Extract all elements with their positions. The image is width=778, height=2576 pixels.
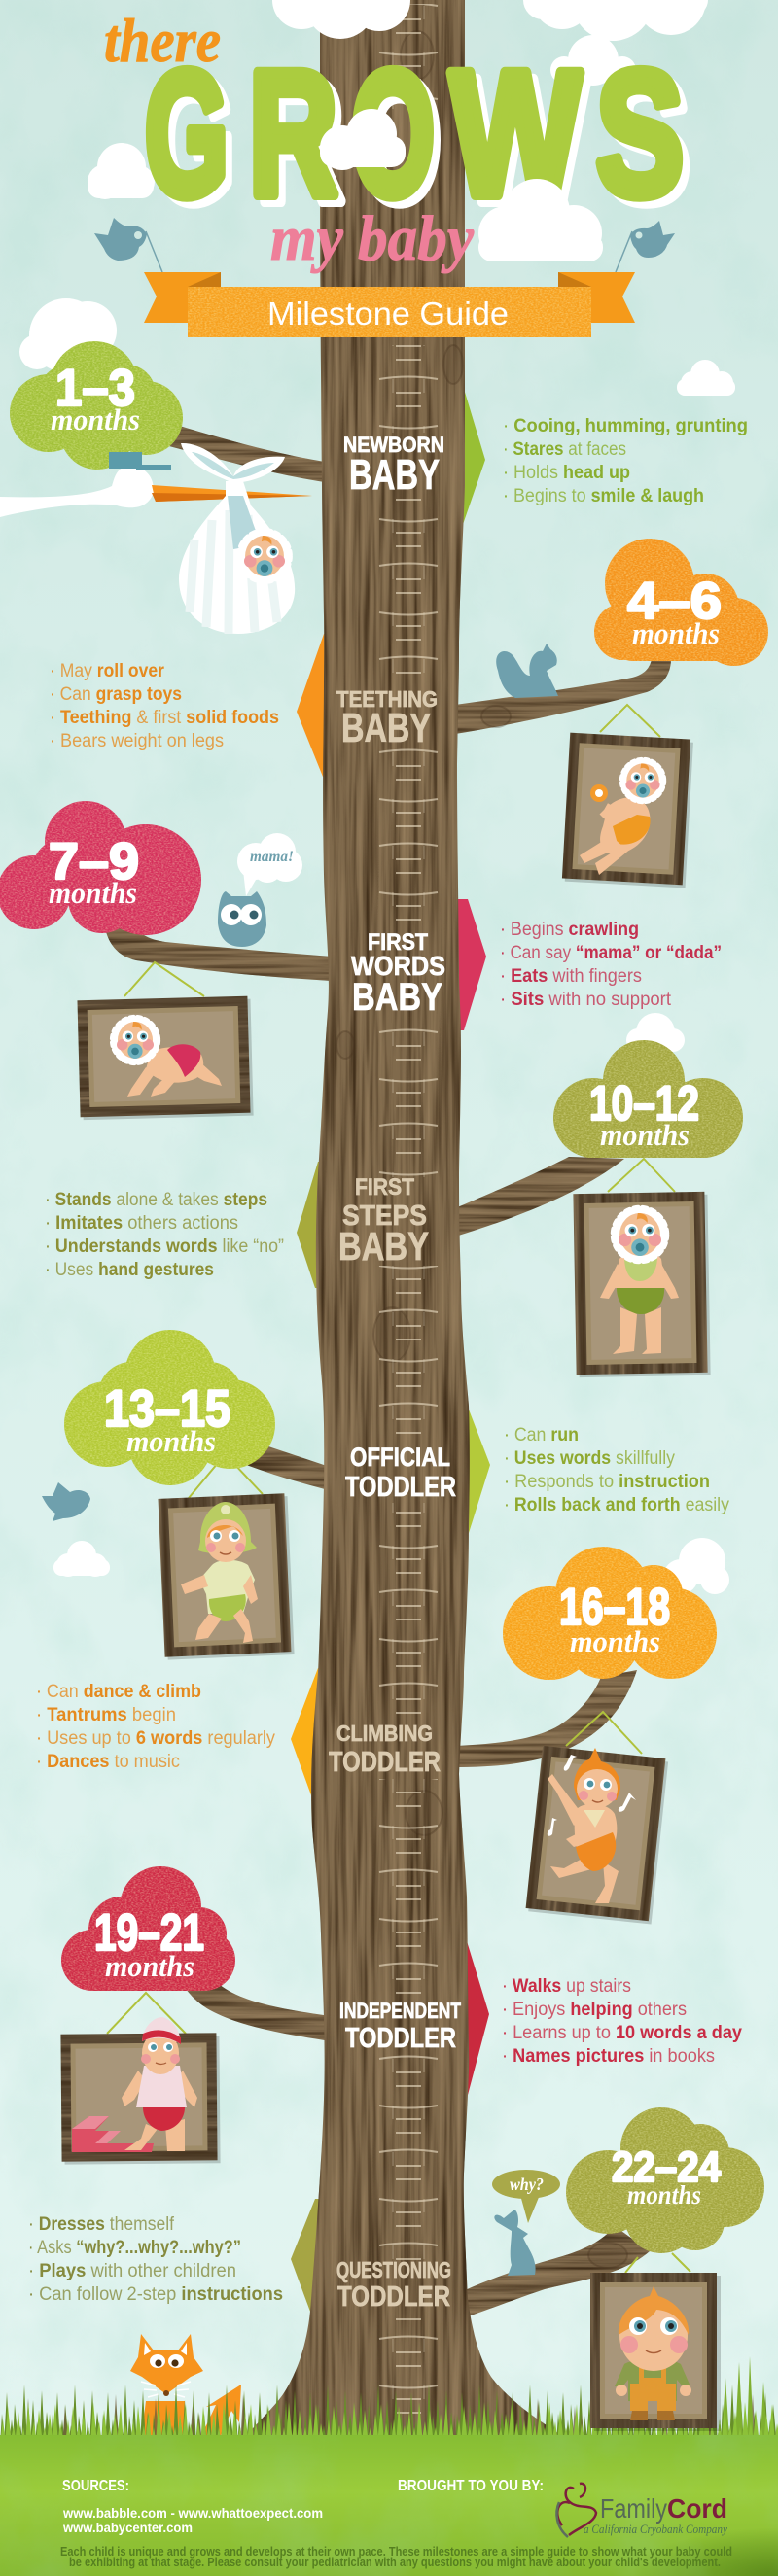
arrow: independent toddler (457, 1941, 489, 2095)
speech bubble: mama: mama! (250, 849, 294, 865)
panel: first words baby label: BABY (352, 976, 442, 1019)
panel: first steps baby label: FIRST (355, 1174, 414, 1201)
age unit: months (105, 1949, 194, 1983)
footer: sources (62, 2478, 323, 2535)
text block: first words milestones: · Can say “mama” or “dada” (500, 943, 722, 963)
age unit: months (600, 1118, 690, 1152)
age unit: months (627, 2180, 701, 2210)
footer: sources: www.babble.com - www.whattoexpect.com (62, 2505, 323, 2521)
panel: first steps baby label: STEPS (342, 1201, 427, 1232)
wood knots (336, 31, 627, 2268)
title: my baby: my baby (270, 203, 475, 274)
logo: FamilyCord (556, 2484, 727, 2537)
text block: questioning toddler milestones (28, 2214, 283, 2305)
text block: first words milestones: · Sits with no support (500, 990, 672, 1010)
panel: 4-6 months (496, 539, 768, 888)
icon: left bird with ribbon string (94, 218, 162, 272)
picture frame with baby holding rattle (562, 733, 693, 888)
text block: official toddler milestones: · Responds to instruction (504, 1472, 710, 1492)
text block: teething milestones: · May roll over (50, 661, 165, 681)
text block: teething milestones: · Teething & first solid foods (50, 708, 279, 728)
panel: teething baby label (336, 686, 438, 750)
age unit: months (632, 616, 720, 650)
picture frame with crawling baby (77, 996, 254, 1120)
age number: 19–21 (94, 1904, 204, 1962)
text block: questioning toddler milestones: · Plays with other children (28, 2261, 236, 2281)
text block: newborn milestones: · Begins to smile & laugh (503, 486, 704, 506)
hanger (124, 962, 204, 996)
cloud under the W of the title (478, 179, 603, 261)
text block: climbing toddler milestones: · Tantrums begin (36, 1705, 176, 1725)
title: GROWS: G (145, 34, 229, 232)
text block: independent toddler milestones: · Enjoys helping others (502, 2000, 687, 2020)
hanger (625, 2253, 690, 2273)
cloud: 1-3 months (10, 341, 183, 470)
cloud: 4-6 months (594, 539, 768, 666)
speech bubble: why: why? (510, 2175, 544, 2194)
cloud: 22-24 months (566, 2107, 764, 2253)
text block: first steps milestones: · Stands alone & takes steps (45, 1190, 267, 1210)
footer: sources: SOURCES: (62, 2478, 129, 2494)
text block: questioning toddler milestones: · Asks “why?...why?...why?” (28, 2238, 241, 2258)
age unit: months (126, 1424, 216, 1458)
text block: independent toddler milestones (502, 1976, 742, 2067)
title: GROWS: W (457, 41, 587, 239)
text block: newborn milestones: · Holds head up (503, 463, 630, 483)
icon: squirrel (496, 644, 558, 698)
panel: teething baby label: BABY (341, 705, 431, 750)
banner text: Milestone Guide (267, 296, 509, 331)
text block: first steps milestones: · Understands words like “no” (45, 1236, 284, 1257)
panel: 1-3 months (0, 341, 312, 634)
panel: 10-12 months (553, 1040, 743, 1377)
text block: independent toddler milestones: · Names pictures in books (502, 2046, 715, 2067)
panel: questioning toddler label: QUESTIONING (336, 2257, 451, 2282)
icon: stork carrying baby bundle (0, 443, 312, 634)
text block: independent toddler milestones: · Walks up stairs (502, 1976, 631, 1997)
tree trunk with wood grain (243, 0, 569, 2440)
text block: questioning toddler milestones: · Dresses themself (28, 2214, 175, 2235)
picture frame with toddler in overalls (590, 2273, 721, 2431)
panel: 19-21 months (60, 1866, 235, 2165)
cloud: 19-21 months (61, 1866, 235, 1991)
panel: independent toddler label: INDEPENDENT (339, 1999, 461, 2023)
age number: 1–3 (55, 360, 135, 417)
banner ribbon (144, 272, 635, 337)
text block: first steps milestones: · Uses hand gestures (45, 1260, 214, 1280)
panel: 16-18 months (503, 1547, 717, 1925)
text block: first steps milestones: · Imitates others actions (45, 1213, 238, 1234)
icon: bird (42, 1482, 90, 1521)
age number: 4–6 (627, 573, 722, 630)
panel: first words baby label (351, 929, 445, 1019)
icon: owl (218, 891, 266, 947)
panel: 13-15 months (42, 1330, 295, 1660)
arrow: climbing toddler (291, 1668, 331, 1828)
text block: independent toddler milestones: · Learns up to 10 words a day (502, 2023, 742, 2043)
text block: climbing toddler milestones: · Dances to music (36, 1752, 180, 1772)
arrow: teething (297, 634, 331, 777)
age number: 10–12 (589, 1076, 699, 1131)
panel: climbing toddler label: CLIMBING (336, 1721, 433, 1746)
text block: questioning toddler milestones: · Can follow 2-step instructions (28, 2284, 283, 2305)
text block: official toddler milestones: · Can run (504, 1425, 579, 1445)
panel: teething baby label: TEETHING (336, 686, 438, 712)
text block: first words milestones: · Begins crawling (500, 920, 639, 940)
text block: newborn milestones: · Stares at faces (503, 439, 626, 460)
text block: first words milestones: · Eats with fingers (500, 966, 642, 987)
arrow: questioning toddler (291, 2199, 331, 2319)
cloud over the O of the title (320, 109, 406, 170)
panel: first steps baby label: BABY (338, 1224, 429, 1269)
title: GROWS: S (596, 34, 684, 232)
text block: first words milestones (500, 920, 722, 1010)
arrow: official toddler (457, 1410, 490, 1533)
grass lawn with blades (0, 2356, 778, 2576)
logo: FamilyCord: Cord (667, 2493, 727, 2524)
text block: teething milestones: · Can grasp toys (50, 684, 182, 705)
title: GROWS: O (358, 41, 442, 239)
age unit: months (51, 402, 140, 436)
age number: 13–15 (104, 1380, 230, 1438)
picture frame with standing baby (573, 1192, 711, 1377)
title: GROWS: O (351, 34, 435, 232)
footer: brought to you by: BROUGHT TO YOU BY: (398, 2478, 544, 2494)
panel: newborn baby label: BABY (349, 451, 440, 499)
title: GROWS: W (450, 34, 581, 232)
title: GROWS: R (256, 41, 344, 239)
panel: 7-9 months (0, 801, 302, 1120)
cloud: 10-12 months (553, 1040, 743, 1158)
age number: 16–18 (559, 1579, 670, 1636)
panel: official toddler label (345, 1443, 456, 1503)
cloud: 7-9 months (0, 801, 201, 935)
footer: disclaimer (60, 2545, 732, 2569)
picture frame with baby in green hat (158, 1493, 295, 1660)
logo: FamilyCord: a California Cryobank Company (584, 2522, 727, 2536)
title: GROWS: S (603, 41, 690, 239)
logo: FamilyCord: Family (600, 2493, 667, 2524)
panel: official toddler label: TODDLER (345, 1472, 456, 1503)
text block: official toddler milestones: · Uses words skillfully (504, 1448, 675, 1469)
title: GROWS: R (249, 34, 337, 232)
cloud: 16-18 months (503, 1547, 717, 1680)
text block: teething milestones (50, 661, 279, 751)
tree branches (105, 424, 671, 2317)
panel: climbing toddler label (329, 1721, 441, 1778)
text block: newborn milestones (503, 416, 748, 506)
text block: climbing toddler milestones (36, 1682, 275, 1772)
white clouds in the background (19, 35, 735, 1594)
panel: first words baby label: FIRST (368, 929, 428, 956)
age unit: months (570, 1624, 660, 1658)
text block: first steps milestones (45, 1190, 284, 1280)
icon: right bird with ribbon string (616, 221, 675, 272)
top white clouds over the trunk (272, 0, 708, 41)
text block: climbing toddler milestones: · Can dance & climb (36, 1682, 201, 1702)
picture frame with dancing baby (525, 1746, 668, 1925)
title: GROWS: G (152, 41, 235, 239)
icon: rabbit (494, 2210, 536, 2276)
panel: newborn baby label: NEWBORN (343, 433, 444, 457)
hanger (608, 1159, 675, 1192)
panel: independent toddler label (339, 1999, 461, 2054)
speech bubble: why (492, 2170, 560, 2223)
panel: newborn baby label (343, 433, 444, 499)
picture frame with baby climbing steps (60, 2017, 221, 2165)
panel: official toddler label: OFFICIAL (350, 1443, 450, 1472)
cloud: 13-15 months (64, 1330, 275, 1485)
age number: 22–24 (612, 2143, 721, 2191)
hanger (107, 1993, 186, 2034)
text block: official toddler milestones: · Rolls back and forth easily (504, 1495, 729, 1515)
panel: climbing toddler label: TODDLER (329, 1747, 441, 1778)
arrow: first steps (297, 1162, 331, 1288)
text block: teething milestones: · Bears weight on legs (50, 731, 224, 751)
title: GROWS (145, 34, 690, 239)
arrow: first words (457, 899, 486, 1030)
panel: questioning toddler label (336, 2257, 451, 2313)
hanger (600, 705, 660, 737)
text block: newborn milestones: · Cooing, humming, grunting (503, 416, 748, 436)
panel: first words baby label: WORDS (351, 951, 445, 981)
age number: 7–9 (49, 833, 139, 890)
panel: 22-24 months (492, 2107, 764, 2431)
text block: official toddler milestones (504, 1425, 729, 1515)
speech bubble: mama (237, 833, 302, 896)
footer: sources: www.babycenter.com (62, 2520, 193, 2535)
panel: questioning toddler label: TODDLER (337, 2281, 450, 2313)
age unit: months (49, 876, 137, 910)
measuring ruler on trunk (334, 4, 450, 2420)
title: there: there (104, 6, 221, 75)
panel: first steps baby label (338, 1174, 429, 1269)
arrow: newborn (452, 389, 485, 536)
text block: climbing toddler milestones: · Uses up to 6 words regularly (36, 1728, 275, 1749)
icon: fox peeking from the grass (130, 2334, 241, 2440)
hanger (566, 1712, 642, 1754)
hanger (189, 1463, 263, 1498)
panel: independent toddler label: TODDLER (345, 2023, 456, 2054)
